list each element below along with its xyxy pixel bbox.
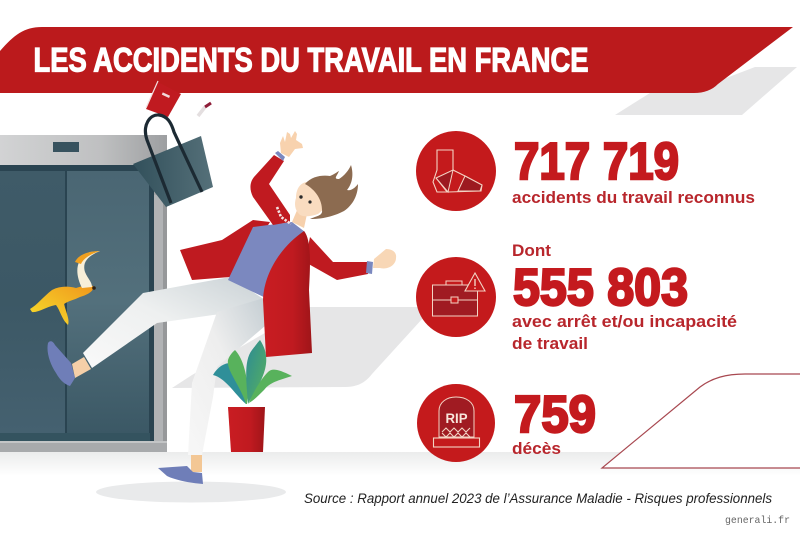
kicking shoe — [47, 341, 75, 386]
fist — [373, 249, 396, 268]
label: accidents du travail reconnus — [512, 188, 755, 207]
number: 555 803 — [513, 259, 688, 317]
icon: tombstone: RIP — [446, 411, 468, 426]
raised cuff — [275, 151, 285, 161]
front cuff — [366, 261, 373, 274]
number: 759 — [514, 386, 596, 444]
bag handle — [145, 115, 202, 203]
standing shoe — [158, 466, 203, 484]
stat: avec arret: de travail — [512, 334, 588, 353]
number: 717 719 — [514, 133, 679, 191]
elevator frame — [0, 135, 167, 452]
back leg — [83, 277, 265, 368]
plant — [213, 340, 292, 452]
kicking ankle — [72, 357, 91, 378]
grey background shape — [172, 307, 433, 388]
elevator display — [53, 142, 79, 152]
bag — [133, 81, 213, 207]
floor band — [0, 452, 800, 476]
label: avec arrêt et/ou incapacité — [512, 312, 737, 331]
back jacket flap — [180, 220, 270, 280]
neck — [292, 208, 307, 228]
falling woman — [47, 131, 396, 484]
hair — [305, 165, 358, 219]
title banner — [0, 27, 793, 93]
leaves — [213, 363, 247, 404]
elevator — [0, 135, 167, 452]
lipstick — [198, 107, 205, 116]
label: décès — [512, 439, 561, 458]
source: Source : Rapport annuel 2023 de l’Assurance Maladie - Risques professionnels — [304, 490, 772, 506]
bag body — [133, 136, 213, 207]
right door — [67, 171, 149, 433]
stat: avec arret — [416, 241, 737, 353]
raised hand — [280, 131, 303, 157]
floor shadow — [96, 482, 286, 502]
stat: deces — [417, 384, 596, 462]
banana peel — [30, 251, 100, 325]
sweater — [228, 222, 305, 300]
stat: accidents reconnus — [416, 131, 755, 211]
outlined red ramp — [602, 374, 800, 468]
grey decorative shape behind banner — [615, 67, 797, 115]
icon: tombstone — [417, 384, 495, 462]
red book — [146, 82, 181, 117]
title: LES ACCIDENTS DU TRAVAIL EN FRANCE — [34, 42, 588, 80]
necklace — [277, 207, 291, 224]
face — [295, 182, 325, 216]
raised arm — [250, 155, 290, 225]
pot — [228, 407, 265, 452]
standing leg — [188, 298, 265, 455]
icon: briefcase and warning — [416, 257, 496, 337]
front jacket panel — [263, 231, 312, 357]
icon: foot — [416, 131, 496, 211]
front arm — [305, 237, 369, 280]
left door — [0, 171, 65, 433]
watermark: generali.fr — [725, 515, 790, 527]
intro word: Dont — [512, 241, 551, 260]
standing ankle — [191, 454, 202, 472]
